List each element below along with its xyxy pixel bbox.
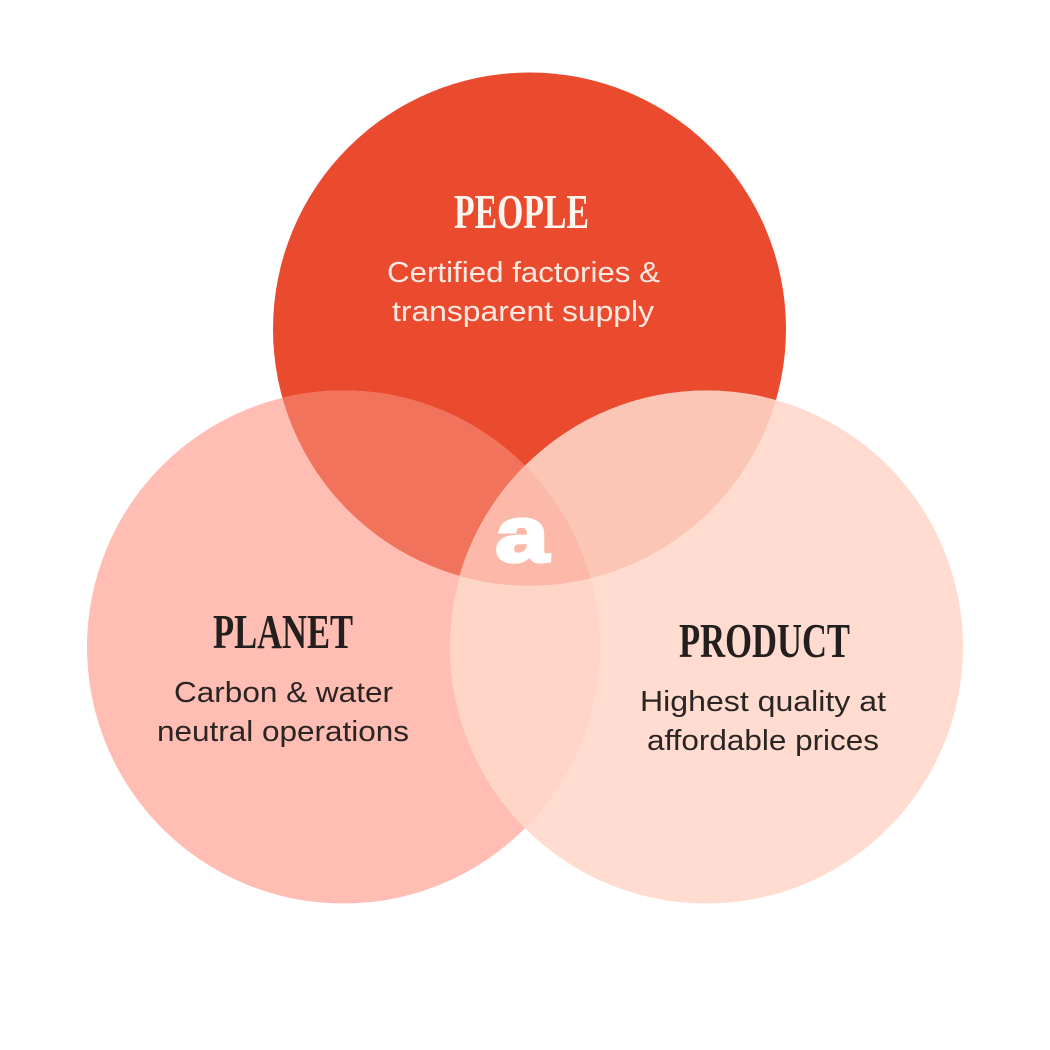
panel: planet <box>157 604 409 748</box>
text: product description: Highest quality at <box>640 686 886 718</box>
venn diagram <box>87 72 963 904</box>
circle: people <box>273 72 786 586</box>
text: people description: transparent supply <box>392 296 655 328</box>
text: planet description <box>157 677 409 748</box>
panel: product <box>640 613 886 757</box>
heading: product: PRODUCT <box>679 613 850 668</box>
text: people description: Certified factories & <box>387 257 660 289</box>
heading: planet: PLANET <box>213 604 353 659</box>
text: planet description: Carbon & water <box>174 677 393 709</box>
panel: people <box>387 184 660 328</box>
heading: people: PEOPLE <box>454 184 589 239</box>
text: product description <box>640 686 886 757</box>
text: planet description: neutral operations <box>157 716 409 748</box>
text: product description: affordable prices <box>647 725 879 757</box>
circle: planet <box>87 390 600 904</box>
text: people description <box>387 257 660 328</box>
logo: letter a: a <box>496 490 549 578</box>
overlap: planet and product <box>564 578 588 584</box>
overlap: centre <box>459 465 590 586</box>
circle: product <box>450 390 963 904</box>
overlap: people and product <box>525 390 776 578</box>
overlap: people and planet <box>282 390 524 576</box>
